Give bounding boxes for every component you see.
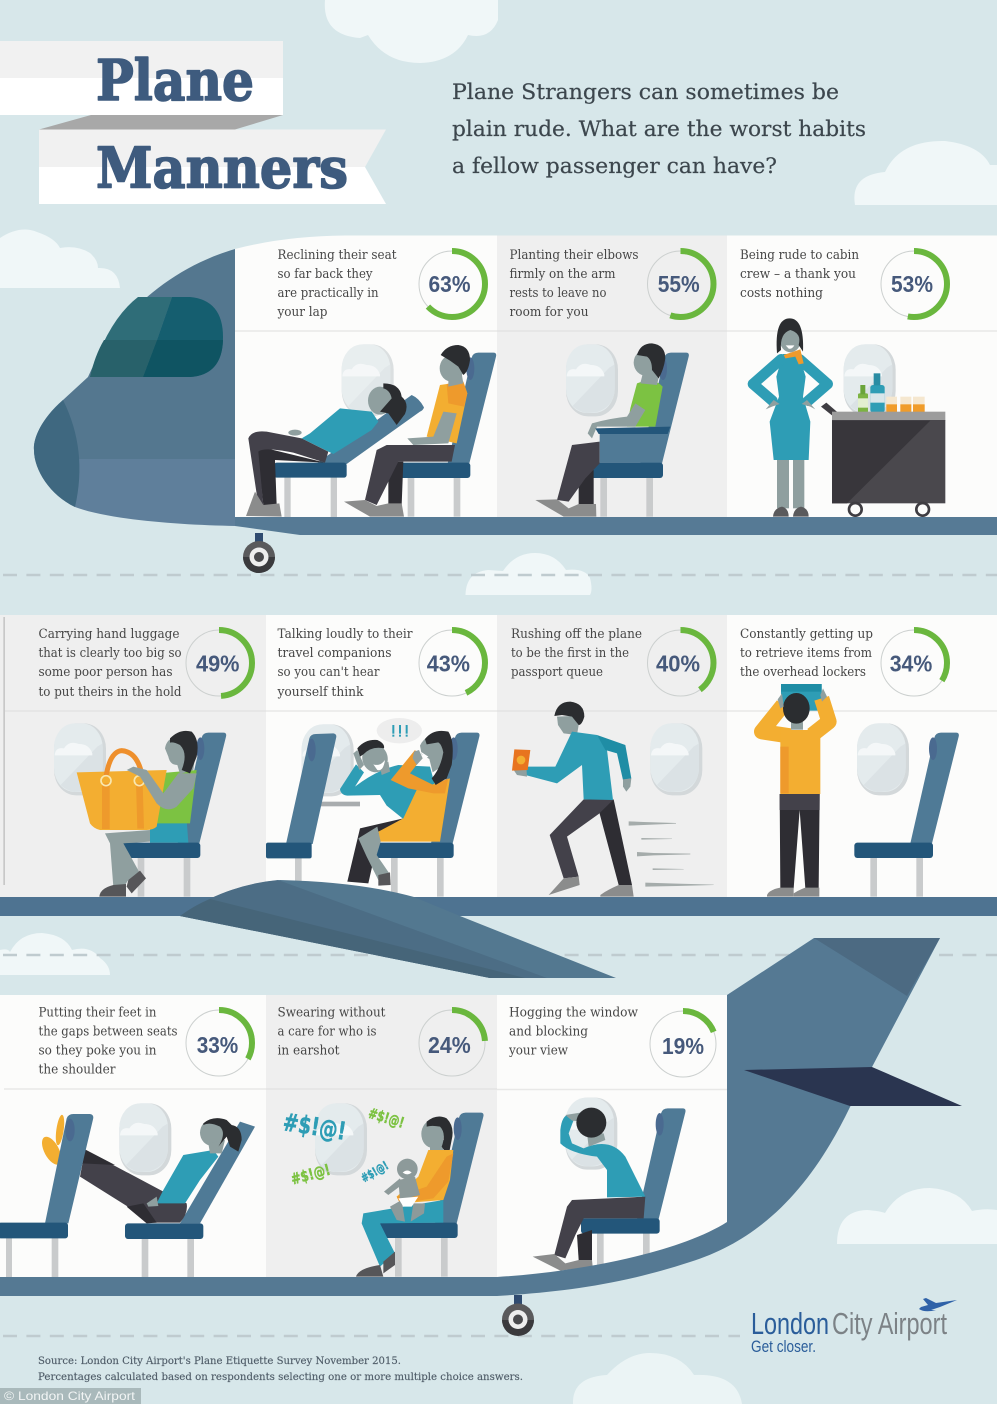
text: swearing: Swearing without — [278, 1004, 386, 1020]
figure: swearing mother and baby — [281, 1103, 484, 1277]
ring: 40 percent — [648, 630, 714, 696]
ring: 19 percent — [650, 1011, 716, 1077]
panel: reclining seat 63% — [235, 236, 497, 518]
landing gear: rear wheel — [502, 1295, 534, 1336]
text: overhead lockers: the overhead lockers — [740, 664, 866, 679]
panel: hand luggage 49% — [0, 615, 266, 898]
text: rushing off: to be the first in the — [511, 645, 629, 660]
text: rude to crew: costs nothing — [740, 285, 823, 300]
figure: running passenger — [512, 702, 714, 897]
panel: swearing 24% — [266, 995, 497, 1278]
figure: passenger at overhead locker — [762, 684, 959, 897]
landing gear: front wheel — [243, 533, 275, 573]
ring: 40 percent: 40% — [656, 651, 700, 677]
figure: passenger hogging window — [533, 1098, 686, 1272]
title ribbon — [0, 41, 386, 204]
ring: 63 percent: 63% — [428, 271, 470, 297]
text: feet: the shoulder — [38, 1062, 116, 1076]
figures: reclining passenger — [246, 344, 496, 517]
text: reclining: Reclining their seat — [278, 247, 396, 262]
text: talking loudly: Talking loudly to their — [278, 626, 413, 641]
ring: 53 percent: 53% — [891, 271, 933, 297]
text: elbows: rests to leave no — [510, 285, 606, 300]
logo: London City Airport: City Airport — [832, 1306, 947, 1341]
text: hogging: your view — [508, 1042, 568, 1058]
text: hand luggage: that is clearly too big so — [38, 645, 182, 660]
title: Plane: Plane — [96, 48, 254, 114]
ring: 34 percent — [881, 630, 947, 696]
text: rushing off: Rushing off the plane — [511, 626, 642, 641]
logo plane icon — [919, 1298, 957, 1311]
ring: 55 percent — [648, 251, 714, 317]
ring: 43 percent — [419, 630, 485, 696]
source note — [38, 1356, 523, 1383]
swear bubble bottom left: #$!@! — [289, 1161, 332, 1189]
text: overhead lockers — [740, 626, 873, 679]
figure: passenger with oversized bag — [54, 723, 226, 897]
text: overhead lockers: Constantly getting up — [740, 626, 873, 641]
ring: 49 percent — [186, 630, 252, 696]
speech bubble — [377, 718, 422, 743]
tail fin shade — [814, 938, 940, 996]
text: elbows: room for you — [510, 304, 588, 319]
ring: 49 percent: 49% — [196, 651, 240, 677]
ring: 24 percent: 24% — [428, 1032, 471, 1058]
panel: elbows 55% — [497, 236, 727, 518]
ring: 55 percent: 55% — [658, 271, 700, 297]
text: talking loudly — [277, 626, 413, 699]
figures: two loud passengers — [266, 718, 480, 897]
logo: London City Airport: Get closer. — [751, 1337, 816, 1356]
ring: 33 percent — [186, 1010, 252, 1076]
fuselage floor: row 2 — [0, 897, 997, 916]
text: hogging: Hogging the window — [509, 1004, 638, 1020]
torso and arms — [762, 698, 829, 794]
ring: 34 percent: 34% — [890, 651, 932, 677]
figure: passenger with feet in seat gap — [0, 1103, 255, 1278]
intro text — [452, 80, 866, 179]
text: feet — [38, 1004, 178, 1076]
source note: Source: London City Airport's Plane Etiquette Survey November 2015. — [38, 1356, 401, 1367]
wing — [180, 880, 616, 978]
nose cone — [34, 400, 79, 507]
text: hand luggage: some poor person has — [38, 664, 172, 679]
intro text: Plane Strangers can sometimes be — [452, 80, 839, 105]
text: rushing off — [511, 626, 642, 679]
plane nose — [34, 249, 236, 526]
text: reclining: so far back they — [278, 266, 373, 281]
text: swearing — [278, 1004, 386, 1058]
tailplane — [744, 1067, 962, 1106]
text: elbows: firmly on the arm — [510, 266, 616, 281]
text: rude to crew: Being rude to cabin — [740, 247, 859, 262]
copyright tag: © London City Airport — [4, 1389, 136, 1403]
dress — [753, 354, 828, 460]
logo: London City Airport: London — [751, 1306, 829, 1341]
figure: flight attendant and trolley — [753, 318, 945, 517]
text: reclining: your lap — [277, 304, 328, 319]
swear bubble large: #$!@! — [281, 1107, 348, 1146]
ring: 24 percent — [419, 1010, 485, 1076]
text: hogging: and blocking — [509, 1024, 588, 1038]
text: hand luggage: to put theirs in the hold — [38, 684, 182, 699]
swear bubble top right: #$!@! — [366, 1105, 406, 1132]
text: elbows — [510, 247, 638, 319]
text: reclining: are practically in — [278, 285, 378, 300]
text: feet: the gaps between seats — [38, 1024, 178, 1038]
fuselage floor: row 1 — [235, 517, 997, 535]
text: reclining — [277, 247, 396, 319]
intro text: plain rude. What are the worst habits — [452, 117, 866, 142]
text: hand luggage — [38, 626, 182, 699]
panel: hogging the window 19% — [497, 995, 727, 1279]
figure: elbow passenger — [535, 343, 689, 517]
text: overhead lockers: to retrieve items from — [740, 645, 872, 660]
text: rude to crew: crew – a thank you — [740, 266, 856, 281]
text: hand luggage: Carrying hand luggage — [38, 626, 180, 641]
text: rushing off: passport queue — [511, 664, 603, 679]
ring: 43 percent: 43% — [427, 651, 470, 677]
cockpit windshield — [90, 297, 223, 377]
text: rude to crew — [740, 247, 859, 300]
source note: Percentages calculated based on respondents selecting one or more multiple choice answers. — [38, 1372, 523, 1383]
text: talking loudly: yourself think — [277, 684, 364, 699]
flight path dashes — [3, 575, 997, 1336]
speed lines — [629, 821, 714, 887]
swear bubble small: #$!@! — [358, 1158, 391, 1185]
ring: 53 percent — [881, 251, 947, 317]
title: Manners: Manners — [96, 136, 348, 202]
panel: feet between seats 33% — [0, 995, 266, 1278]
tail and rear fuselage — [0, 938, 962, 1296]
text: swearing: in earshot — [278, 1042, 340, 1058]
text: talking loudly: travel companions — [278, 645, 392, 660]
logo: London City Airport — [751, 1298, 957, 1356]
panel: overhead lockers 34% — [727, 615, 997, 898]
text: talking loudly: so you can't hear — [278, 664, 380, 679]
text: feet: so they poke you in — [38, 1042, 156, 1058]
ring: 33 percent: 33% — [197, 1032, 238, 1058]
panel: talking loudly 43% — [266, 615, 497, 898]
text: elbows: Planting their elbows — [510, 247, 638, 262]
text: hogging — [508, 1004, 638, 1058]
text: feet: Putting their feet in — [38, 1004, 156, 1020]
panel: rushing off 40% — [497, 615, 727, 898]
panel: rude to cabin crew 53% — [727, 236, 997, 518]
text: swearing: a care for who is — [278, 1024, 376, 1038]
ring: 19 percent: 19% — [662, 1033, 704, 1059]
ring: 63 percent — [419, 251, 485, 317]
intro text: a fellow passenger can have? — [452, 154, 777, 179]
